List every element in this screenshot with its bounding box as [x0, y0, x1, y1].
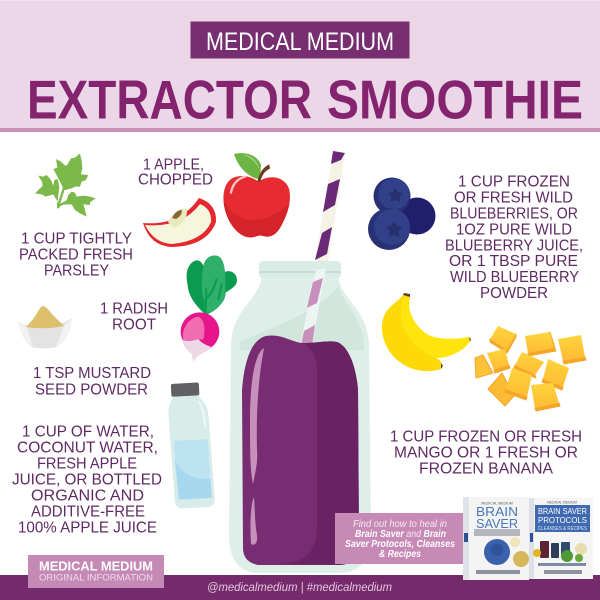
icon: paper straw top — [315, 151, 345, 263]
label: blueberries: OR 1 TBSP PURE — [449, 253, 578, 270]
icon: smoothie bottle — [229, 261, 371, 573]
label: mustard — [33, 365, 151, 398]
social handles: @medicalmedium | #medicalmedium — [207, 582, 392, 594]
book: Brain Saver — [463, 497, 529, 580]
label: radish — [100, 300, 168, 333]
icon: parsley — [35, 153, 96, 217]
icon: mango cubes — [475, 326, 586, 411]
callout: Brain Saver and Brain — [355, 528, 446, 540]
label: liquid: 100% APPLE JUICE — [18, 520, 157, 537]
icon: blueberries — [368, 178, 436, 250]
label: blueberries: 1 CUP FROZEN — [458, 174, 570, 191]
smoothie liquid — [242, 335, 359, 565]
label: blueberries: POWDER — [480, 285, 548, 302]
icon: apple slice — [143, 198, 216, 247]
label: liquid: ADDITIVE-FREE — [31, 504, 145, 521]
header band — [0, 0, 600, 132]
book: Brain Saver Protocols: MEDICAL MEDIUM — [547, 500, 577, 504]
brand label: MEDICAL MEDIUM — [206, 28, 394, 56]
label: liquid: JUICE, OR BOTTLED — [12, 472, 162, 489]
label: parsley — [19, 231, 133, 279]
callout: Saver Protocols, Cleanses — [345, 538, 455, 550]
straw inside bottle — [300, 268, 326, 345]
label: parsley: PARSLEY — [44, 262, 109, 279]
label: parsley: PACKED FRESH — [19, 247, 133, 264]
callout — [335, 513, 463, 564]
book: Brain Saver Protocols: PROTOCOLS — [538, 515, 587, 525]
label: liquid: FRESH APPLE — [37, 456, 137, 473]
icon: whole apple — [223, 153, 290, 237]
brand label — [190, 22, 410, 58]
label: blueberries: BLUEBERRIES, OR — [450, 206, 578, 223]
label: apple: CHOPPED — [138, 172, 213, 188]
label: liquid — [12, 424, 162, 537]
label: mango — [390, 429, 582, 478]
label: liquid: COCONUT WATER, — [17, 440, 158, 457]
book: Brain Saver: MEDICAL MEDIUM — [481, 502, 513, 506]
book: Brain Saver: SAVER — [476, 516, 518, 531]
footer band — [0, 575, 600, 600]
book: Brain Saver Protocols — [529, 498, 593, 579]
icon: water bottle — [167, 382, 215, 509]
icon: banana — [382, 293, 471, 371]
callout: & Recipes — [379, 548, 421, 560]
original information badge — [28, 555, 164, 588]
label: blueberries: 1OZ PURE WILD — [456, 222, 572, 239]
label: blueberries: WILD BLUEBERRY — [450, 269, 579, 286]
label: radish: ROOT — [112, 316, 157, 333]
label: liquid: ORGANIC AND — [31, 488, 144, 505]
label: mango: MANGO OR 1 FRESH OR — [394, 445, 578, 462]
label: mango: 1 CUP FROZEN OR FRESH — [390, 429, 582, 446]
icon: mustard powder bowl — [18, 306, 72, 348]
icon: radish — [181, 256, 237, 362]
original information badge: MEDICAL MEDIUM — [39, 559, 153, 574]
title: EXTRACTOR — [27, 70, 312, 131]
label: apple: 1 APPLE, — [143, 156, 204, 173]
label: parsley: 1 CUP TIGHTLY — [21, 231, 132, 248]
book: Brain Saver Protocols: CLEANSES & RECIPES — [538, 526, 587, 532]
label: mustard: SEED POWDER — [35, 381, 148, 398]
book: Brain Saver: BRAIN — [476, 504, 518, 519]
label: radish: 1 RADISH — [100, 300, 168, 317]
label: blueberries: BLUEBERRY JUICE, — [445, 238, 583, 254]
original information badge: ORIGINAL INFORMATION — [39, 573, 153, 584]
label: mango: FROZEN BANANA — [419, 460, 554, 478]
callout: Find out how to heal in — [353, 518, 447, 530]
label: apple — [138, 156, 213, 188]
label: liquid: 1 CUP OF WATER, — [22, 424, 154, 441]
book: Brain Saver Protocols: BRAIN SAVER — [538, 506, 587, 516]
label: blueberries — [445, 174, 583, 302]
title — [27, 70, 583, 131]
label: mustard: 1 TSP MUSTARD — [33, 365, 151, 382]
label: blueberries: OR FRESH WILD — [454, 190, 573, 207]
